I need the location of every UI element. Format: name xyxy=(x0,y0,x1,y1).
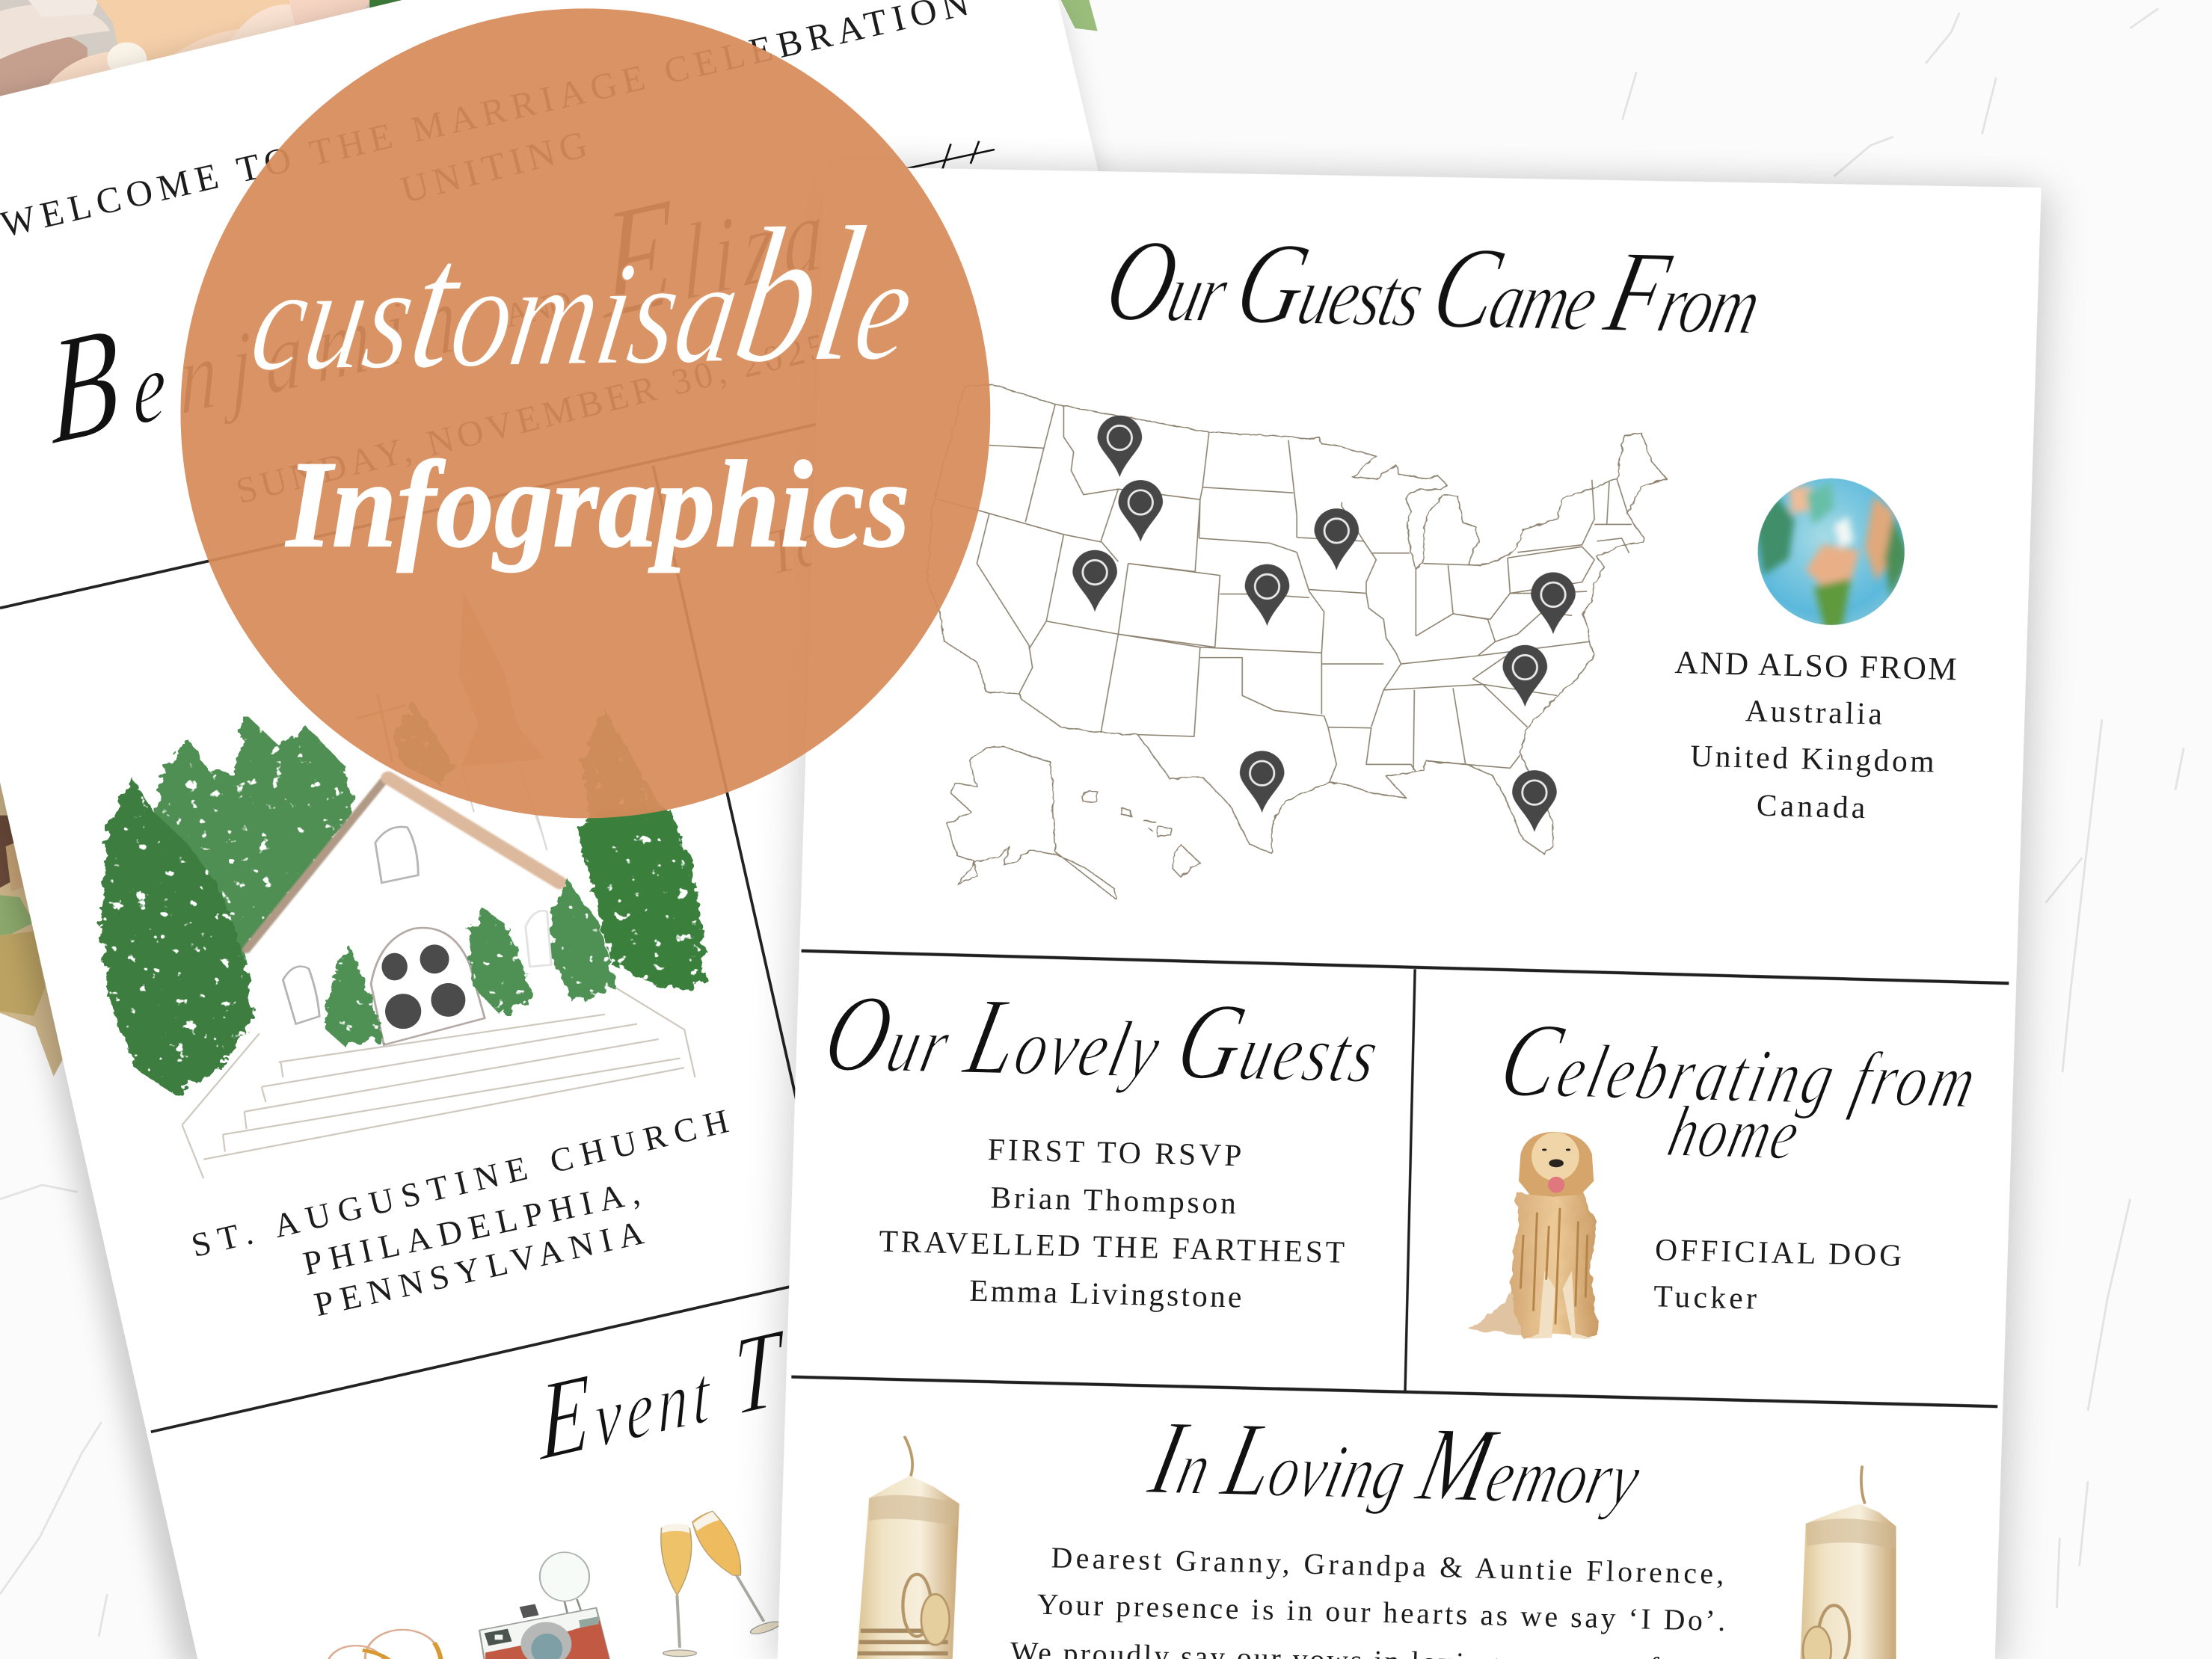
left card shadow xyxy=(0,3,1109,1659)
section dividers xyxy=(791,951,2009,1406)
divider above timeline xyxy=(151,1274,847,1432)
panel: our lovely guests xyxy=(814,971,1393,1314)
right card shadow to the left xyxy=(766,169,2030,1659)
church facade xyxy=(245,776,615,1045)
icon: wedding rings xyxy=(328,1630,441,1659)
first to rsvp name: Brian Thompson xyxy=(990,1180,1237,1220)
pin florida xyxy=(1512,770,1557,832)
state borders central and east xyxy=(1297,478,1632,783)
bride name: Eliza xyxy=(600,129,824,354)
badge script line: customisable xyxy=(240,186,930,412)
pin pennsylvania xyxy=(1531,573,1576,634)
list heading: AND ALSO FROM xyxy=(1674,644,1957,687)
icon: left candle xyxy=(856,1436,959,1659)
steeple and cross xyxy=(356,591,547,850)
venue line 1: ST. AUGUSTINE CHURCH xyxy=(188,1102,732,1264)
badge bold line: Infographics xyxy=(285,435,910,573)
icon: golden retriever xyxy=(1469,1132,1598,1339)
celebrating heading line 1: Celebrating from xyxy=(1490,1000,1991,1130)
pin nebraska xyxy=(1245,564,1289,626)
map pins xyxy=(1072,416,1576,832)
groom name: B enjamin xyxy=(49,215,457,478)
right card shadow to the right xyxy=(791,169,2056,1659)
memory line 1: Dearest Granny, Grandpa & Auntie Florence, xyxy=(1051,1541,1724,1590)
travelled farthest name: Emma Livingstone xyxy=(969,1273,1242,1314)
dog name: Tucker xyxy=(1653,1278,1757,1316)
and label: AND xyxy=(501,283,576,335)
leaf top right xyxy=(1061,0,1098,31)
venue name xyxy=(188,1102,732,1323)
panel: celebrating from home xyxy=(1469,1000,1991,1339)
roof xyxy=(247,778,560,949)
centre door xyxy=(371,928,485,1045)
panel: left programme card xyxy=(0,0,1114,1659)
official dog label: OFFICIAL DOG xyxy=(1655,1232,1902,1272)
small tree left of door xyxy=(326,946,384,1047)
steps xyxy=(182,988,695,1178)
country united kingdom: United Kingdom xyxy=(1690,739,1935,779)
first to rsvp label: FIRST TO RSVP xyxy=(987,1132,1242,1172)
state borders west xyxy=(935,404,1328,736)
memory heading: In Loving Memory xyxy=(1140,1398,1655,1527)
country canada: Canada xyxy=(1756,788,1866,825)
celebrating heading line 2: home xyxy=(1661,1092,1807,1175)
icon: right candle xyxy=(1800,1465,1896,1659)
USA map xyxy=(927,384,1666,899)
badge: customisable infographics xyxy=(180,8,990,818)
second script fragment: Ta xyxy=(756,505,833,589)
icon: champagne flutes xyxy=(661,1511,782,1657)
pin utah xyxy=(1072,550,1117,612)
event timeline heading: Event Ti xyxy=(538,1299,802,1485)
pin montana xyxy=(1097,416,1142,477)
flowers left edge xyxy=(0,762,64,1077)
other countries list xyxy=(1674,644,1957,825)
church illustration xyxy=(100,591,706,1178)
rear tree xyxy=(156,715,354,964)
alaska xyxy=(947,747,1116,899)
right front tree xyxy=(549,877,615,1003)
pin wyoming xyxy=(1118,480,1163,542)
hawaii xyxy=(1081,790,1200,877)
arched windows xyxy=(283,827,551,1024)
country australia: Australia xyxy=(1745,693,1882,731)
panel: right programme card xyxy=(777,167,2042,1659)
large left tree xyxy=(100,778,255,1095)
memory line 2: Your presence is in our hearts as we say ‘I Do’. xyxy=(1036,1588,1726,1637)
small tree right of door xyxy=(467,908,534,1015)
guests map heading: Our Guests Came From xyxy=(1094,215,1777,359)
divider under header xyxy=(0,418,847,608)
pin north carolina xyxy=(1502,645,1547,707)
surname tail flourish xyxy=(903,141,995,169)
trees behind the badge xyxy=(393,701,672,820)
right large tree xyxy=(577,808,706,991)
venue line 2: PHILADELPHIA, xyxy=(300,1174,643,1283)
mainland outline xyxy=(927,384,1666,855)
travelled farthest label: TRAVELLED THE FARTHEST xyxy=(879,1224,1345,1269)
icon: camera xyxy=(479,1552,609,1659)
badge circle xyxy=(180,8,990,818)
pin iowa xyxy=(1314,508,1359,570)
vertical divider xyxy=(653,466,799,1109)
uniting label: UNITING xyxy=(396,123,592,212)
panel: in loving memory xyxy=(856,1398,1896,1659)
pin texas xyxy=(1240,751,1284,813)
venue line 3: PENNSYLVANIA xyxy=(311,1213,647,1323)
flowers top left xyxy=(0,0,423,127)
date line: SUNDAY, NOVEMBER 30, 2025 xyxy=(232,325,830,511)
lovely guests heading: Our Lovely Guests xyxy=(814,971,1393,1106)
icon: watercolour globe xyxy=(1755,478,1910,632)
door panes xyxy=(381,944,465,1029)
timeline icons xyxy=(328,1511,782,1659)
